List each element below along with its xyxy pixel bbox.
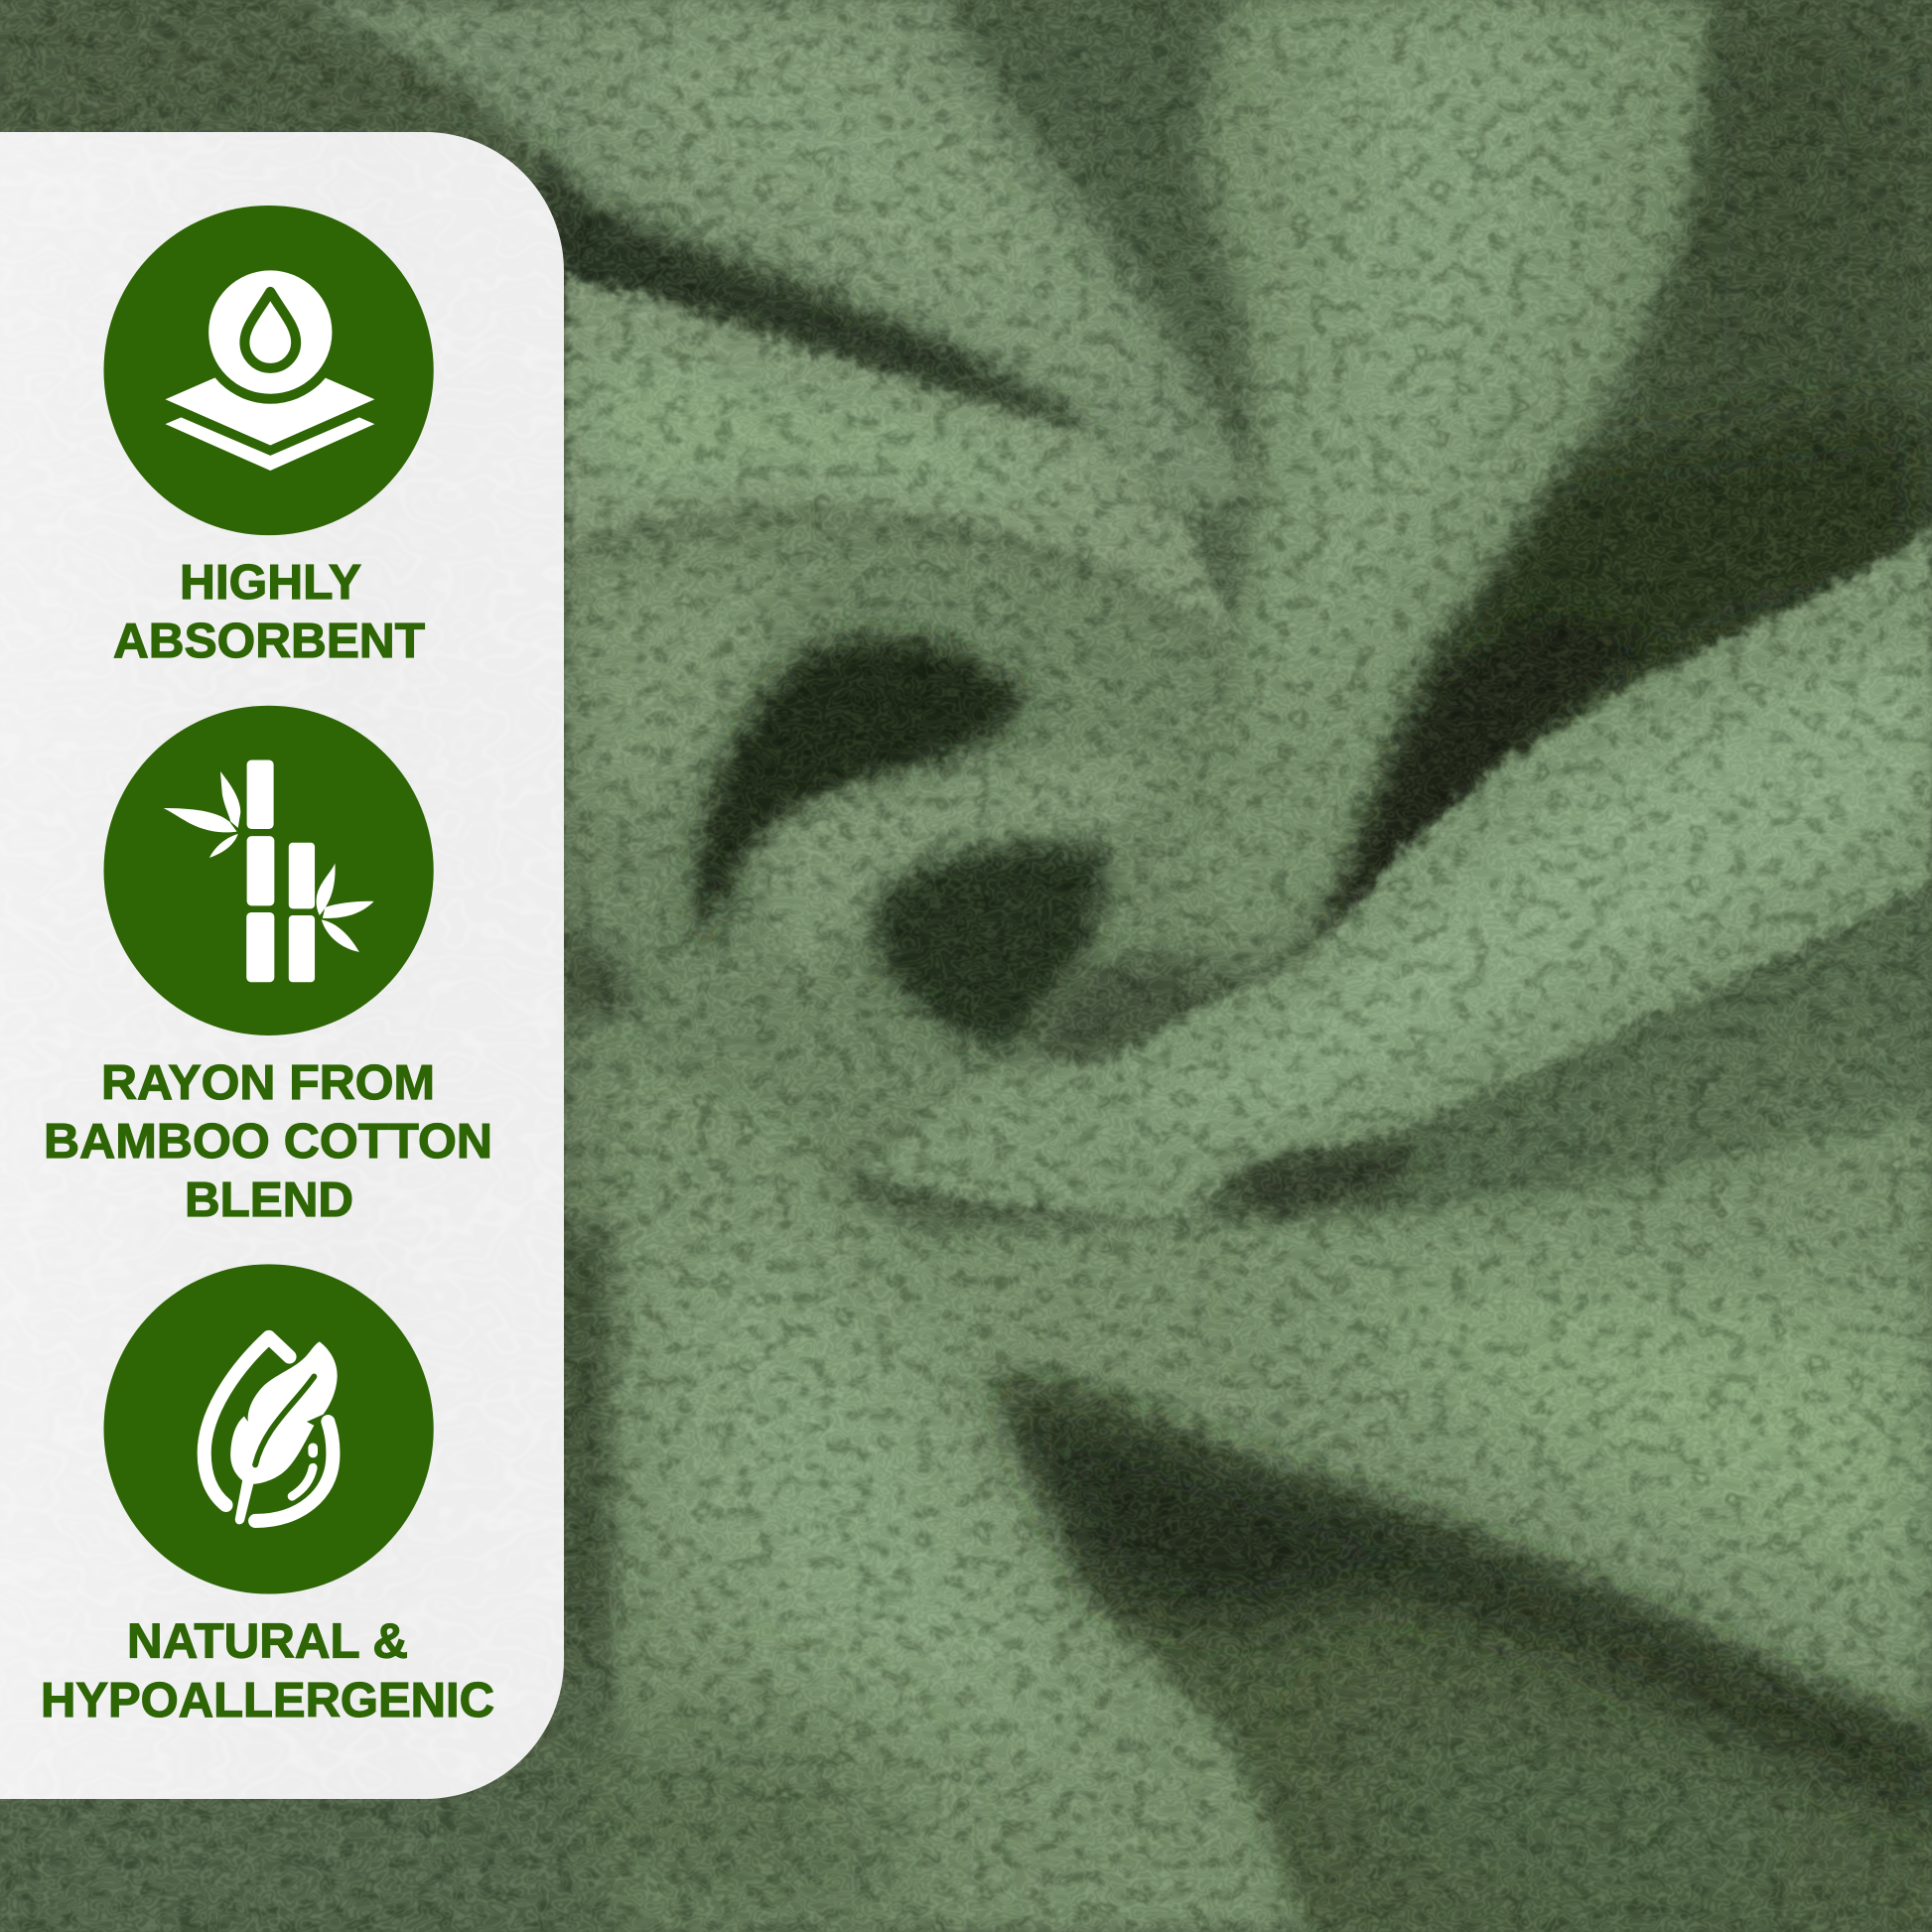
dark hole 2 [873,844,1104,1053]
panel: feature list [0,132,564,1799]
label: rayon from bamboo cotton blend [44,1055,492,1227]
knot right lit [1182,727,1355,973]
label: highly absorbent: HIGHLY [180,555,361,610]
icon badge: bamboo [104,706,434,1035]
label: rayon from bamboo cotton blend: RAYON FROM [101,1055,435,1110]
bottom-left strip [0,1774,579,1932]
dark hole 1 crescent [695,636,1029,949]
ridge F [788,1109,1932,1737]
ridge B [564,277,1238,640]
label: natural and hypoallergenic: NATURAL & [127,1614,408,1668]
ridge A upper [296,0,1251,523]
feature: rayon from bamboo cotton blend [44,706,492,1227]
icon badge: feather in drop [104,1264,434,1594]
label: natural and hypoallergenic [41,1614,494,1727]
label: natural and hypoallergenic: HYPOALLERGENIC [41,1673,494,1727]
ridge G lower centre [617,1059,1318,1932]
icon badge: water drop on layers [104,206,434,535]
mid zone E [1355,863,1932,1307]
swirl area [564,505,1238,1232]
shadow gully between ridge A and C [949,0,1245,407]
label: highly absorbent: ABSORBENT [113,614,425,668]
label: rayon from bamboo cotton blend: BLEND [185,1173,353,1227]
label: highly absorbent [113,555,425,668]
label: rayon from bamboo cotton blend: BAMBOO COTTON [44,1114,492,1169]
ridge D [863,530,1932,1220]
dark shadow under ridge A [542,136,1109,431]
lit band between holes [752,752,1182,973]
left crease [564,924,640,1023]
dark pocket H and lower right [986,1374,1932,1932]
feature: natural and hypoallergenic [41,1264,494,1727]
very dark gap above ridge D [1318,617,1663,961]
feature: highly absorbent [104,206,434,668]
vertical ridge C [1165,0,1707,911]
